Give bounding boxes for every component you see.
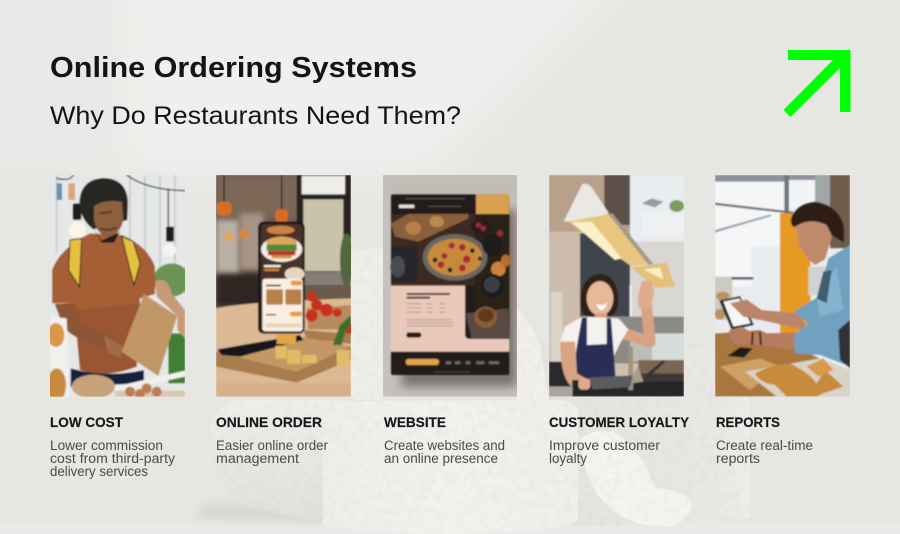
photo 4: smiling waitress <box>549 175 684 397</box>
column: reports: REPORTS <box>716 414 780 430</box>
cheese <box>275 334 350 366</box>
phone <box>727 347 753 358</box>
central cylinder <box>323 400 578 534</box>
board <box>216 346 351 384</box>
lower scene <box>549 362 572 387</box>
column: customer loyalty: loyalty <box>549 451 587 466</box>
back block <box>525 343 750 526</box>
column: customer loyalty: Improve customer <box>549 438 661 453</box>
photo 2: phone ordering app <box>216 175 355 397</box>
column: customer loyalty: CUSTOMER LOYALTY <box>549 414 690 430</box>
column: low cost: cost from third-party <box>50 451 175 466</box>
pink panel <box>391 286 509 352</box>
column: reports <box>716 414 813 466</box>
column: online order: management <box>216 451 299 466</box>
lump right of website photo <box>517 308 549 400</box>
photo 1: delivery courier <box>47 175 190 402</box>
floor shadow <box>195 503 330 522</box>
subtitle: Why Do Restaurants Need Them? <box>50 102 461 130</box>
column: website: WEBSITE <box>384 414 446 430</box>
face <box>587 281 613 316</box>
title <box>50 52 461 130</box>
apron <box>572 317 616 380</box>
croissants <box>745 358 850 397</box>
icon: green arrow <box>784 50 850 117</box>
column: reports: reports <box>716 451 760 466</box>
leaning small rock <box>580 431 692 526</box>
column: online order: ONLINE ORDER <box>216 414 322 430</box>
column: website: Create websites and <box>384 438 505 453</box>
left rock <box>203 400 340 522</box>
helmet <box>79 178 128 229</box>
column: online order <box>216 414 328 466</box>
head <box>795 213 832 265</box>
paper bag <box>155 280 185 338</box>
column: website <box>384 414 505 466</box>
photo 3: website mockup <box>383 175 517 397</box>
upper rock behind photos <box>351 248 383 400</box>
body <box>52 233 155 373</box>
column: low cost: Lower commission <box>50 438 163 453</box>
face <box>94 201 123 237</box>
arms <box>730 299 807 330</box>
title: Online Ordering Systems <box>50 52 417 84</box>
column: online order: Easier online order <box>216 438 328 453</box>
hair <box>580 274 618 317</box>
counter <box>715 329 820 397</box>
waving arm <box>623 298 650 342</box>
column: low cost <box>50 414 175 479</box>
table <box>216 297 351 384</box>
torso <box>794 245 850 367</box>
flat phone <box>217 335 303 357</box>
column: reports: Create real-time <box>716 438 813 453</box>
shirt <box>560 316 629 356</box>
column: website: an online presence <box>384 451 498 466</box>
photo 5: staff using tablet <box>715 175 850 397</box>
column: low cost: LOW COST <box>50 414 123 430</box>
column: low cost: delivery services <box>50 464 148 479</box>
column: customer loyalty <box>549 414 690 466</box>
lamp <box>564 184 609 222</box>
podium stones <box>195 248 750 534</box>
tablet <box>719 296 754 330</box>
counter <box>572 380 684 397</box>
upright phone <box>258 222 305 334</box>
lower <box>71 368 144 387</box>
